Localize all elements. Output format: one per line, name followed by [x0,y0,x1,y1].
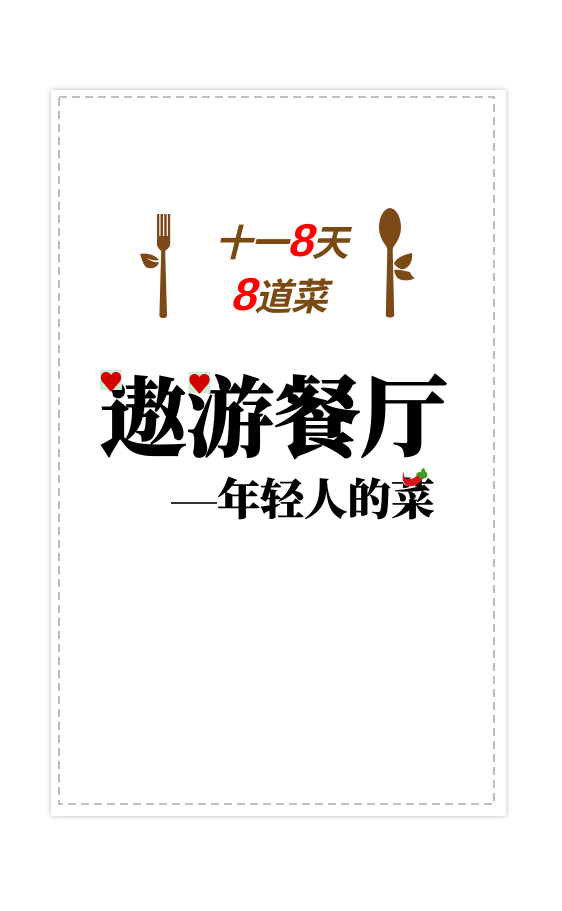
heading: 8道菜: 8道菜 [228,268,335,320]
dashed card border [58,96,495,805]
icon: spoon with leaves [379,208,415,318]
icon: chili pepper [402,468,428,486]
icon: fork with leaf [140,214,170,318]
panel: white card [51,90,506,816]
icon: heart right [188,372,210,394]
subtitle: 年轻人的菜: 年轻人的菜 [217,477,434,525]
title: 遨游餐厅: 遨游餐厅 [100,371,448,468]
icon: heart left [100,370,122,392]
heading: 十一8天: 十一8天 [213,214,356,266]
